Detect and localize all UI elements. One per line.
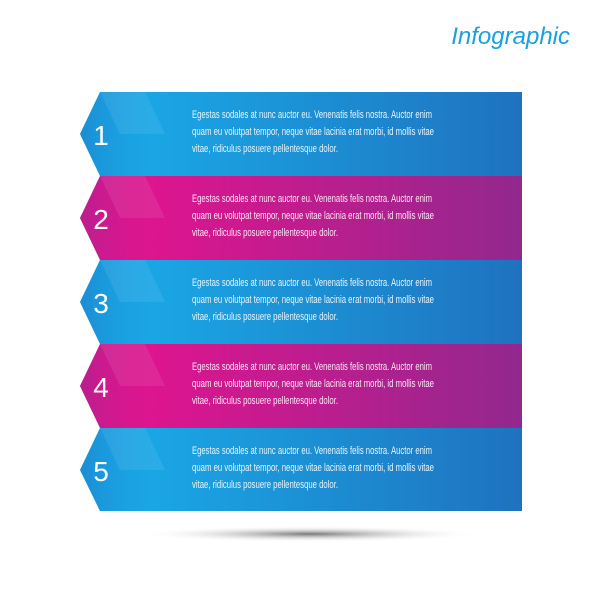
row 2 xyxy=(80,176,522,260)
row 2: Egestas sodales at nunc auctor eu. Venenatis felis nostra. Auctor enim xyxy=(192,193,432,205)
row 3: 3 xyxy=(93,288,109,319)
row 4: quam eu volutpat tempor, neque vitae lacinia erat morbi, id mollis vitae xyxy=(192,378,434,390)
row 5: Egestas sodales at nunc auctor eu. Venenatis felis nostra. Auctor enim xyxy=(192,445,432,457)
row 1: 1 xyxy=(93,120,109,151)
row 1 xyxy=(80,92,522,176)
row 2: 2 xyxy=(93,204,109,235)
row 1: Egestas sodales at nunc auctor eu. Venenatis felis nostra. Auctor enim xyxy=(192,109,432,121)
shadow xyxy=(140,526,480,542)
row 1: vitae, ridiculus posuere pellentesque dolor. xyxy=(192,143,338,155)
row 3: Egestas sodales at nunc auctor eu. Venenatis felis nostra. Auctor enim xyxy=(192,277,432,289)
row 5: 5 xyxy=(93,456,109,487)
row 5 xyxy=(80,428,522,511)
row 5: vitae, ridiculus posuere pellentesque dolor. xyxy=(192,479,338,491)
row 2: vitae, ridiculus posuere pellentesque dolor. xyxy=(192,227,338,239)
row 4: 4 xyxy=(93,372,109,403)
row 3: vitae, ridiculus posuere pellentesque dolor. xyxy=(192,311,338,323)
title: Infographic xyxy=(451,23,570,50)
row 4 xyxy=(80,344,522,428)
row 4: Egestas sodales at nunc auctor eu. Venenatis felis nostra. Auctor enim xyxy=(192,361,432,373)
row 3: quam eu volutpat tempor, neque vitae lacinia erat morbi, id mollis vitae xyxy=(192,294,434,306)
row 1: quam eu volutpat tempor, neque vitae lacinia erat morbi, id mollis vitae xyxy=(192,126,434,138)
row 3 xyxy=(80,260,522,344)
row 4: vitae, ridiculus posuere pellentesque dolor. xyxy=(192,395,338,407)
row 2: quam eu volutpat tempor, neque vitae lacinia erat morbi, id mollis vitae xyxy=(192,210,434,222)
row 5: quam eu volutpat tempor, neque vitae lacinia erat morbi, id mollis vitae xyxy=(192,462,434,474)
